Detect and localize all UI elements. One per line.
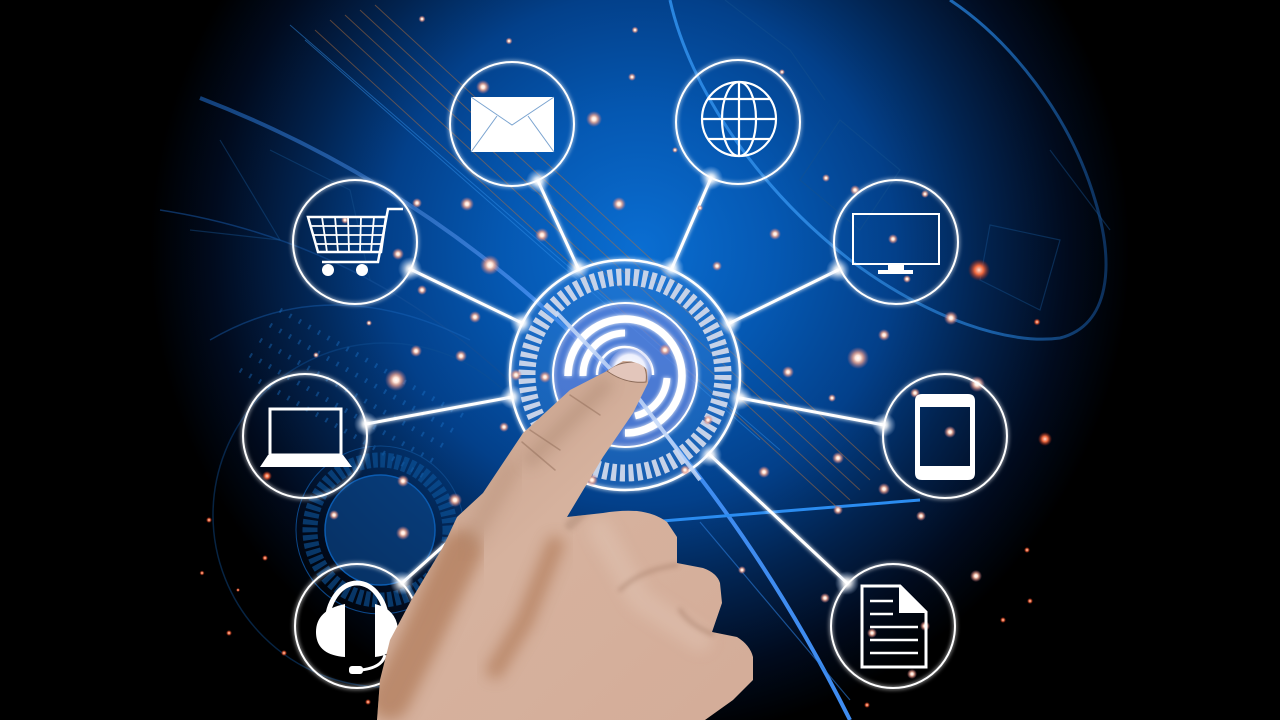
hub: outer ring bbox=[510, 260, 740, 490]
hand: tanned shading bands bbox=[390, 385, 712, 700]
hub: inner disc bbox=[553, 303, 697, 447]
glowing line crossing the hub bbox=[556, 312, 700, 480]
central hub dial bbox=[510, 260, 740, 490]
decorative circuit arcs and hatching bbox=[160, 0, 1110, 720]
hand: skin base bbox=[370, 355, 765, 720]
icon: globe bbox=[676, 60, 800, 184]
connector lines from hub to icons bbox=[366, 178, 884, 583]
hub: concentric arcs bbox=[568, 319, 682, 433]
hub: tick ring bbox=[527, 277, 723, 473]
hand: fingernail bbox=[607, 362, 646, 382]
icon: laptop bbox=[243, 374, 367, 498]
icon: shopping cart bbox=[293, 180, 417, 304]
icon: headset bbox=[295, 564, 419, 688]
node flares bbox=[354, 166, 896, 595]
glowing sparks field bbox=[313, 16, 985, 679]
decorative tech wheel, lower left bbox=[213, 343, 557, 687]
hub: white core glow bbox=[608, 348, 652, 392]
hub: soft glow disc bbox=[510, 260, 740, 490]
outer red sparks bbox=[200, 259, 1052, 708]
icon: desktop monitor bbox=[834, 180, 958, 304]
hand with pointing finger bbox=[370, 355, 765, 720]
illustration: finger touching a digital network hub bbox=[160, 0, 1113, 720]
icon: email envelope bbox=[450, 62, 574, 186]
icon: tablet bbox=[883, 374, 1007, 498]
icon: document bbox=[831, 564, 955, 688]
